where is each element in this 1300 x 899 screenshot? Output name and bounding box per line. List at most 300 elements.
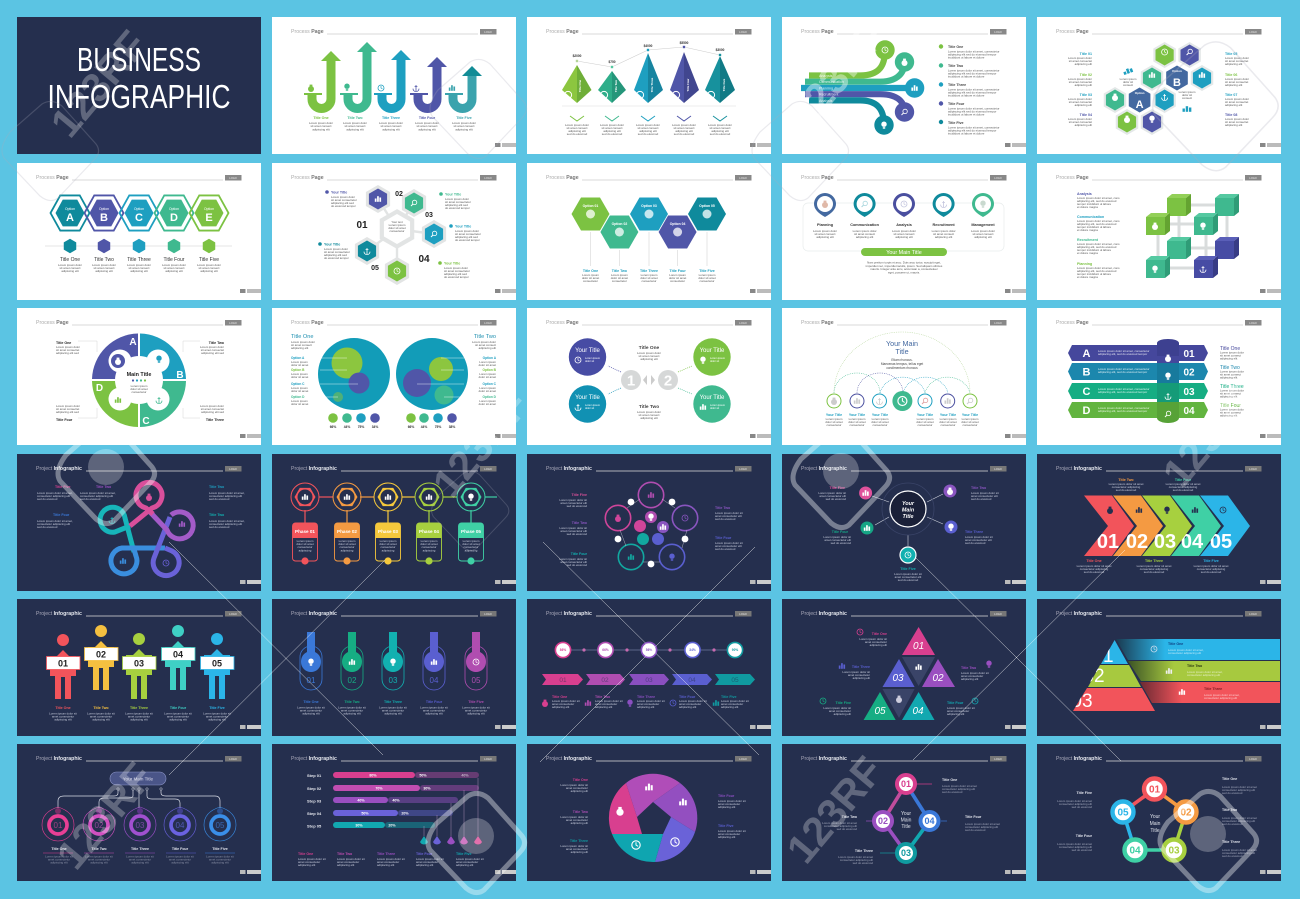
callouts: amet consectetur — [865, 640, 887, 644]
labels: Lorem ipsum dolor sit — [206, 854, 234, 858]
callouts: Title One — [56, 341, 71, 345]
node numbers: 02 — [95, 821, 104, 830]
legend: adipiscing elit — [721, 705, 739, 709]
hexagons: Option 04 — [670, 222, 686, 226]
panel: hub and spokes — [782, 454, 1026, 591]
quadrant letters — [96, 337, 184, 427]
panel: phases: Lorem ipsum — [421, 539, 437, 543]
labels: dolor sit amet — [698, 276, 716, 280]
pyramid numbers — [1075, 648, 1113, 707]
labels: Title Three — [382, 116, 400, 120]
hub: Main — [902, 508, 915, 514]
callouts: Title Five — [1203, 559, 1219, 563]
circles: Lorem ipsum — [585, 357, 600, 360]
chevron shapes and numbers: 05 — [1210, 531, 1232, 553]
right text: Option C — [483, 382, 497, 386]
panel: pyramid kites: sed do eiusmod — [710, 132, 731, 136]
labels: Title Five — [199, 257, 219, 263]
panel: people: 04 — [173, 650, 183, 660]
bars: 80% — [369, 774, 377, 778]
labels: Title Two — [337, 852, 353, 856]
step labels: Step 04 — [307, 811, 322, 816]
legend: Lorem ipsum dolor sit amet, consectetur — [948, 68, 999, 72]
labels: Title Two — [612, 269, 628, 273]
left labels: Lorem ipsum dolor — [1068, 117, 1092, 121]
right labels — [1225, 52, 1249, 127]
labels: consectetur — [700, 279, 715, 283]
chevron bars: 01 — [559, 677, 567, 684]
legend: adipiscing elit sed do eiusmod tempor — [948, 90, 996, 94]
left text: adipiscing elit — [571, 789, 588, 793]
labels: Title One — [583, 269, 598, 273]
left text: adipiscing elit — [571, 850, 588, 854]
callouts — [822, 778, 1000, 865]
centre title: Title — [1150, 828, 1160, 834]
heading — [291, 175, 516, 293]
labels: Title Five — [456, 116, 472, 120]
labels: adipiscing elit — [456, 863, 474, 867]
left text: tempor incididunt ut labore — [1077, 272, 1111, 276]
node numbers — [54, 821, 225, 830]
titles: Title Two — [474, 334, 496, 340]
callouts: Lorem ipsum dolor sit — [823, 535, 851, 539]
values: $2000 — [573, 54, 582, 58]
heading — [546, 466, 771, 584]
heading — [801, 466, 1026, 584]
heading: LOGO — [484, 757, 492, 761]
panel: arcs and circles — [782, 308, 1026, 445]
legend: adipiscing elit sed do eiusmod tempor — [948, 72, 996, 76]
left text: amet consectetur — [566, 847, 588, 851]
panel: phases: dolor sit amet — [338, 542, 356, 546]
callouts: consectetur adipiscing elit — [942, 787, 975, 791]
callouts: consectetur adipiscing elit — [37, 494, 70, 498]
panel: branching flow — [782, 17, 1026, 154]
left labels: Title 02 — [1080, 73, 1092, 77]
callouts: adipiscing elit sed — [201, 410, 224, 414]
labels: amet consectetur — [341, 708, 363, 712]
heading: LOGO — [739, 321, 747, 325]
panel: hexagon cluster — [1037, 17, 1281, 154]
panel: phases: consectetur — [464, 545, 479, 549]
labels: amet consectetur — [300, 708, 322, 712]
labels: Lorem ipsum dolor sit — [462, 706, 490, 710]
callouts: sit amet consectetur — [445, 200, 471, 204]
labels: Lorem ipsum — [940, 417, 956, 421]
dashed arrows — [608, 366, 692, 394]
chevron shapes and numbers: 01 — [1097, 531, 1119, 553]
labels: Title One — [55, 706, 71, 710]
right text: amet consectetur elit — [715, 544, 742, 548]
right text: Lorem ipsum — [479, 399, 496, 403]
labels: Lorem ipsum dolor — [452, 121, 476, 125]
callouts: adipiscing elit sed — [324, 253, 347, 257]
right text: Lorem ipsum dolor sit — [718, 799, 746, 803]
numbers: 02 — [395, 191, 403, 198]
left callouts — [1057, 791, 1093, 852]
panel: pyramid kites: sit amet consect — [602, 126, 623, 130]
labels: adipiscing elit — [208, 718, 226, 722]
labels: adipiscing elit — [169, 718, 187, 722]
watermark overlay: 123RF — [42, 22, 156, 146]
panel: timeline chevrons: 86% — [560, 648, 566, 652]
callouts: Title Five — [829, 486, 845, 490]
labels: dolor sit amet — [961, 420, 979, 424]
panel: option hexagons A-E: Option — [204, 207, 214, 211]
callouts: consectetur adipiscing — [1169, 485, 1198, 489]
chevrons and text — [562, 106, 736, 121]
labels: adipiscing elit — [382, 127, 400, 131]
left text: Option B — [291, 368, 305, 372]
chevron bars: 03 — [645, 677, 653, 684]
panel: option hexagons A-E: D — [170, 212, 178, 224]
labels: Title Two — [94, 257, 114, 263]
panel: pyramid kites: sed do eiusmod — [567, 132, 588, 136]
right text: adipiscing elit — [718, 805, 736, 809]
left text: tempor incididunt ut labore — [1077, 248, 1111, 252]
left labels: adipiscing elit — [1075, 103, 1092, 107]
callouts: sit amet consectetur — [455, 232, 481, 236]
callouts: consectetur adipiscing elit — [965, 825, 998, 829]
callouts: Title Three — [1145, 559, 1163, 563]
right text: sit amet consect — [475, 343, 496, 347]
panel: pentagon network: 04 — [1129, 846, 1141, 856]
callouts: sed do eiusmod — [1144, 570, 1165, 574]
labels: Lorem ipsum dolor sit — [164, 712, 192, 716]
labels: consectetur — [850, 423, 865, 427]
right labels: adipiscing elit — [1220, 394, 1238, 398]
callouts: Lorem ipsum dolor sit — [971, 491, 999, 495]
nodes — [1112, 778, 1196, 860]
labels: Title Four — [669, 269, 686, 273]
capsules — [300, 646, 487, 690]
numbers: 03 — [389, 676, 398, 685]
numbers: 03 — [425, 212, 433, 219]
callouts: Lorem ipsum dolor sit — [894, 572, 922, 576]
node numbers: 04 — [176, 821, 185, 830]
left labels: sit amet consectet — [1069, 59, 1092, 63]
right labels: Lorem ipsum dolor — [1220, 408, 1244, 412]
labels: Lorem ipsum dolor sit — [49, 712, 77, 716]
right text: amet consectetur elit — [715, 514, 742, 518]
ribbon text: Lorem ipsum dolor sit amet, consectetur — [1098, 349, 1149, 353]
labels: consectetur — [918, 423, 933, 427]
panel: location pins — [782, 163, 1026, 300]
left text: tempor incididunt ut labore — [1077, 202, 1111, 206]
main title — [110, 772, 166, 785]
labels: adipiscing elit — [312, 127, 330, 131]
heading: LOGO — [484, 321, 492, 325]
quadrant letters: A — [129, 337, 137, 348]
numbers: 01 — [356, 220, 368, 231]
labels: Lorem ipsum dolor sit — [338, 706, 366, 710]
centre text: sit amet consect — [639, 413, 660, 417]
panel: timeline chevrons: 90% — [732, 648, 738, 652]
labels: adipiscing elit — [455, 127, 473, 131]
labels: Recruitment — [933, 223, 955, 227]
labels: adipiscing elit — [343, 712, 361, 716]
right text: dolor sit amet — [479, 363, 496, 367]
panel: J arrows — [272, 17, 516, 154]
left text: dolor sit amet — [291, 389, 309, 393]
callouts: Lorem ipsum dolor — [200, 345, 224, 349]
right text: adipiscing elit — [479, 346, 496, 350]
callouts: amet consectetur elit — [965, 538, 992, 542]
quadrants — [92, 334, 186, 427]
bars: 40% — [461, 774, 469, 778]
labels: Title Five — [212, 847, 228, 851]
labels: Your Title — [962, 413, 978, 417]
callouts: Lorem ipsum dolor — [331, 195, 355, 199]
nodes — [859, 484, 958, 563]
circles — [569, 338, 731, 423]
left callouts: Title Four — [1076, 834, 1093, 838]
band content: Title Two — [1187, 664, 1203, 668]
labels: adipiscing elit — [130, 269, 148, 273]
callouts: Title Three — [206, 418, 224, 422]
legend: Lorem ipsum dolor sit amet, consectetur — [948, 88, 999, 92]
knot — [100, 482, 193, 576]
panel: people: 05 — [212, 658, 222, 668]
labels — [49, 706, 231, 722]
panel: phases: Lorem ipsum — [297, 539, 313, 543]
labels: Title Four — [170, 706, 187, 710]
callouts: sed do eiusmod — [1084, 570, 1105, 574]
panel: pyramid kites: adipiscing elit — [639, 129, 657, 133]
icon row: 75% — [435, 425, 441, 429]
labels: Title Two — [93, 706, 109, 710]
heading: LOGO — [994, 467, 1002, 471]
callouts: consectetur adipiscing — [1112, 485, 1141, 489]
panel: option hexagons A-E: A — [66, 212, 74, 224]
timeline — [45, 245, 232, 247]
left callouts: sed do eiusmod — [1072, 848, 1092, 852]
callouts: Lorem ipsum dolor sit — [859, 637, 887, 641]
left text: amet consectetur — [566, 786, 588, 790]
callouts: amet consectetur elit — [971, 494, 998, 498]
labels: Your Title — [940, 413, 956, 417]
right text: Lorem ipsum dolor sit — [715, 541, 743, 545]
labels: consectetur — [963, 423, 978, 427]
heading — [1056, 29, 1281, 147]
centre title: Title — [901, 824, 911, 830]
centre column — [1157, 339, 1179, 423]
icon row: 34% — [372, 425, 378, 429]
callouts: sit amet consectet — [56, 348, 79, 352]
labels — [813, 223, 995, 239]
labels: dolor sit amet — [582, 276, 599, 280]
panel: timeline chevrons: 56% — [646, 648, 652, 652]
hexagons: Option 01 — [583, 204, 598, 208]
centre text: Lorem ipsum — [389, 223, 406, 227]
legend: amet consectetur — [679, 702, 701, 706]
labels — [298, 852, 484, 867]
links — [1123, 789, 1186, 850]
letters and numbers: 03 — [1183, 387, 1195, 398]
right text: Lorem ipsum — [479, 360, 496, 364]
right labels: sit amet consect — [1220, 354, 1241, 358]
hexagons — [1104, 42, 1213, 135]
bar labels: Analysis — [819, 74, 833, 78]
labels: amet consectetur — [169, 858, 191, 862]
right text: sed do eiusmod — [715, 547, 736, 551]
icons — [308, 84, 455, 92]
labels: adipiscing elit — [418, 127, 436, 131]
main title: consectetur — [132, 390, 147, 394]
callouts: Title Four — [1175, 478, 1192, 482]
legend — [542, 695, 749, 709]
step labels — [307, 773, 322, 828]
kite titles: Title Three — [650, 77, 654, 92]
labels: Title Three — [384, 700, 402, 704]
title: INFOGRAPHIC — [48, 78, 230, 115]
panel: pyramid kites: adipiscing elit — [711, 129, 729, 133]
numbers: 01 — [307, 676, 316, 685]
labels: sit amet consect — [454, 124, 475, 128]
chevron bars — [542, 674, 755, 685]
heading: Project Infographic — [801, 611, 847, 617]
circles — [555, 642, 743, 658]
band content: consectetur adipiscing elit — [1204, 696, 1237, 700]
callouts: consectetur adipiscing elit — [209, 494, 242, 498]
callouts: amet consectetur — [829, 709, 851, 713]
callouts: amet consectetur elit — [895, 575, 922, 579]
step labels: Step 01 — [307, 773, 322, 778]
labels: adipiscing elit — [171, 860, 189, 864]
left text: Option D — [291, 395, 305, 399]
left text: Title Four — [571, 552, 588, 556]
ribbon text — [1098, 349, 1149, 413]
left text: Lorem ipsum dolor sit amet, cons — [1077, 266, 1120, 270]
labels: amet consectetur — [90, 714, 112, 718]
circles: Your Title — [575, 348, 601, 354]
number dots — [615, 499, 688, 567]
hub — [882, 483, 934, 535]
labels: Lorem ipsum dolor — [162, 263, 186, 267]
heading: Project Infographic — [36, 756, 82, 762]
legend: amet consectetur — [637, 702, 659, 706]
panel: chevrons — [1037, 454, 1281, 591]
right callouts: Lorem ipsum dolor sit amet — [1222, 848, 1257, 852]
panel: pyramid kites: sit amet consect — [567, 126, 588, 130]
right text: dolor sit amet — [479, 375, 496, 379]
panel: people — [17, 599, 261, 736]
left text: Option C — [291, 382, 305, 386]
chevron icons — [1107, 506, 1226, 514]
callouts: Title One — [942, 778, 957, 782]
labels: Lorem ipsum dolor sit — [420, 706, 448, 710]
right labels: Title Four — [1220, 403, 1241, 409]
left text: adipiscing elit, sed do eiusmod — [1077, 199, 1117, 203]
labels: amet consectetur — [52, 714, 74, 718]
bars — [333, 772, 469, 828]
circles — [827, 391, 977, 411]
labels: Your Title — [849, 413, 865, 417]
labels: adipiscing elit — [165, 269, 183, 273]
callouts: adipiscing elit sed — [444, 272, 467, 276]
panel: phases: adipiscing — [423, 548, 436, 552]
right labels: Title One — [1220, 346, 1240, 352]
heading — [801, 320, 1026, 438]
labels: Title One — [60, 257, 80, 263]
centre title: Main — [1150, 821, 1161, 827]
right labels: Lorem ipsum dolor — [1225, 56, 1249, 60]
left text: adipiscing elit, sed do eiusmod — [1077, 222, 1117, 226]
labels: amet consectetur — [88, 858, 110, 862]
panel: hexagon cluster: A — [1136, 99, 1144, 111]
labels: amet consectetur — [167, 714, 189, 718]
panel: option hexagons A-E: Option — [169, 207, 179, 211]
labels — [825, 413, 979, 427]
right labels: Title 07 — [1225, 93, 1237, 97]
legend: incididunt ut labore et dolore — [948, 94, 985, 98]
labels: Lorem ipsum — [872, 417, 888, 421]
bar labels: Communication — [819, 80, 844, 84]
labels: sit amet consect — [894, 232, 915, 236]
labels: amet consectetur — [129, 858, 151, 862]
right text: adipiscing elit — [718, 835, 736, 839]
callouts — [820, 629, 992, 716]
labels: Title One — [313, 116, 329, 120]
labels: Lorem ipsum dolor — [379, 121, 403, 125]
callouts: Title Two — [1118, 478, 1134, 482]
callouts: adipiscing elit — [870, 643, 887, 647]
icon row — [328, 413, 457, 429]
left text: Title One — [573, 778, 588, 782]
left text: et dolore magna — [1077, 251, 1098, 255]
right labels: sit amet consect — [1220, 410, 1241, 414]
heading: Process Page — [801, 175, 834, 181]
icons — [111, 354, 162, 404]
heading: Project Infographic — [291, 756, 337, 762]
callouts: adipiscing elit sed — [455, 235, 478, 239]
heading: LOGO — [994, 757, 1002, 761]
callouts: amet consectetur — [961, 674, 983, 678]
callouts: Lorem ipsum dolor sit — [961, 671, 989, 675]
legend: amet consectetur — [552, 702, 574, 706]
heading: Project Infographic — [546, 611, 592, 617]
heading: LOGO — [739, 612, 747, 616]
team icon: consect — [1123, 83, 1133, 87]
labels: dolor sit amet — [669, 276, 686, 280]
legend: adipiscing elit — [552, 705, 570, 709]
left text: Lorem ipsum — [291, 386, 308, 390]
heading: Project Infographic — [36, 466, 82, 472]
hexagons — [572, 198, 726, 248]
callouts: sed do eiusmod — [853, 861, 873, 865]
kites — [562, 52, 735, 103]
bars: 20% — [401, 812, 409, 816]
right labels: Title Three — [1220, 384, 1244, 390]
left text — [559, 493, 588, 567]
callouts: Title Four — [965, 815, 982, 819]
callouts: sed do eiusmod — [209, 497, 230, 501]
labels: sit amet consect — [164, 266, 185, 270]
labels: amet consectetur — [456, 860, 478, 864]
legend: Lorem ipsum dolor sit — [595, 699, 623, 703]
labels: adipiscing elit — [130, 718, 148, 722]
callouts: adipiscing elit sed — [201, 351, 224, 355]
left text: et dolore magna — [1077, 205, 1098, 209]
panel: phases: Phase 01 — [295, 529, 315, 534]
kite titles — [578, 77, 726, 92]
labels: Title Four — [164, 257, 185, 263]
callouts: Lorem ipsum dolor sit — [947, 706, 975, 710]
bar labels: Recruitment — [819, 92, 838, 96]
values: $3000 — [716, 48, 725, 52]
right labels: Title 05 — [1225, 52, 1237, 56]
panel: phases: adipiscing — [382, 548, 395, 552]
